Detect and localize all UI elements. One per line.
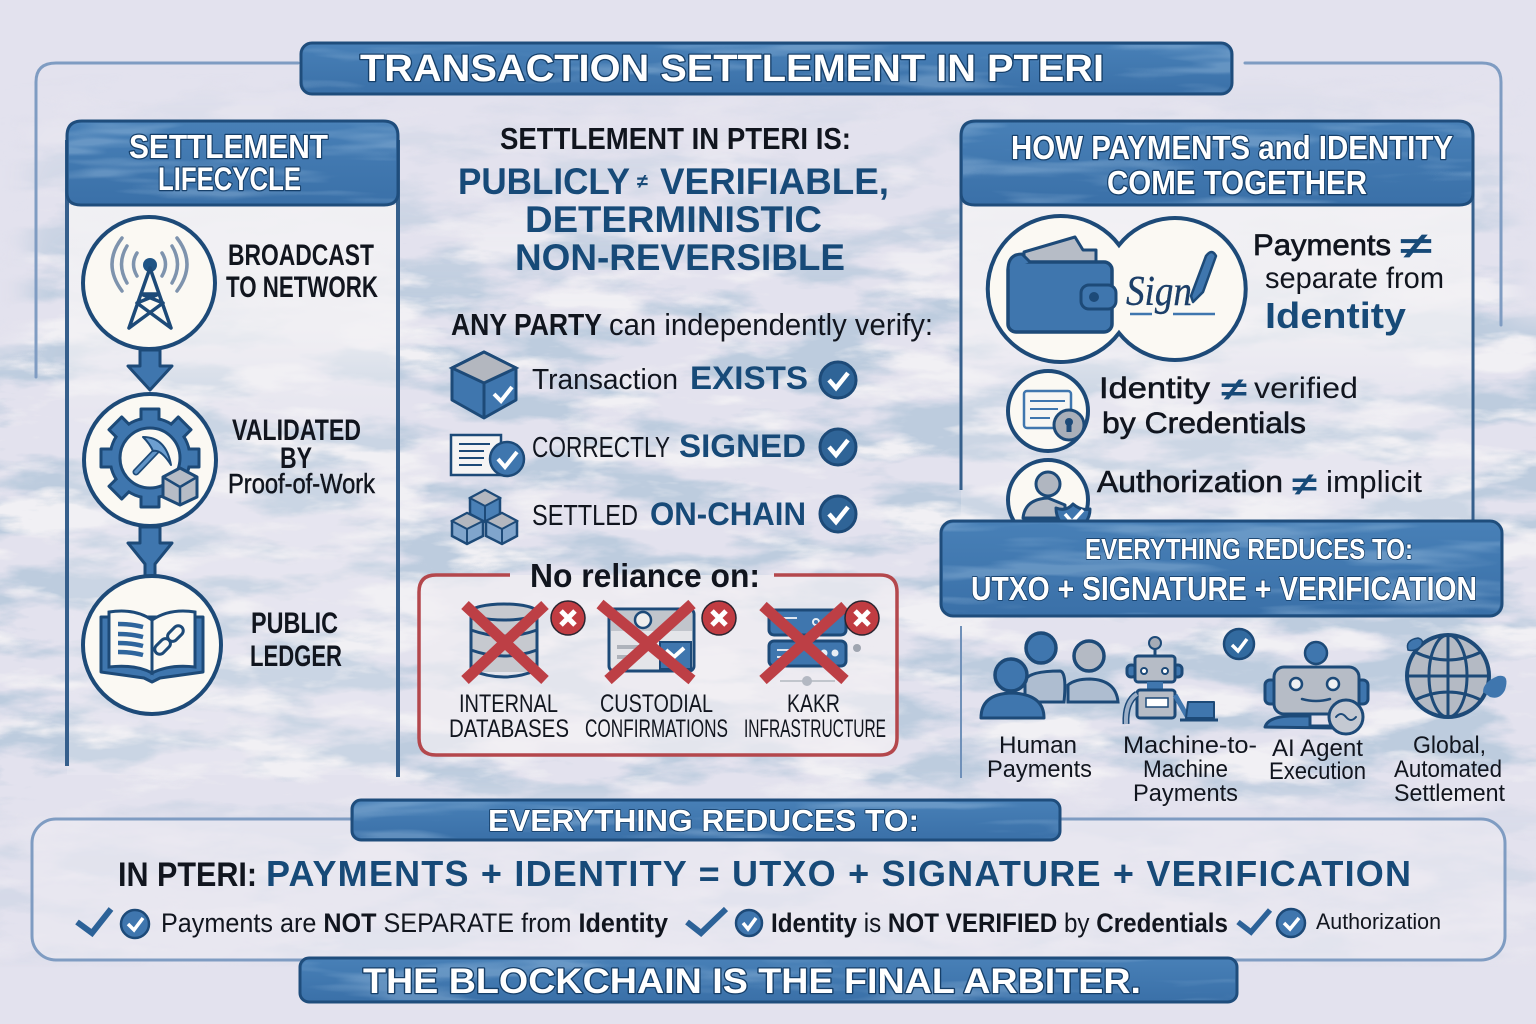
arrow: broadcast to validated [128, 350, 172, 390]
text: payments not separate from identity: separate from [1265, 262, 1444, 295]
panel: bottom summary [32, 800, 1505, 960]
outer frame: top section [36, 63, 1501, 377]
icon: public ledger book [83, 576, 221, 714]
equation: PAYMENTS + IDENTITY = UTXO + SIGNATURE + VERIFICATION [266, 853, 1411, 894]
panel header: SETTLEMENT [129, 128, 328, 165]
label: validated: Proof-of-Work [228, 468, 376, 499]
icon: proof-of-work gear [84, 394, 216, 526]
badge: x [551, 601, 585, 635]
use case: ai agent execution: AI Agent [1272, 735, 1363, 762]
icon: globe [1407, 635, 1506, 717]
icon: robot at desk [1126, 637, 1218, 724]
equation: IN PTERI: [118, 856, 257, 894]
icon: people [981, 633, 1118, 718]
label: custodial confirmations: CONFIRMATIONS [585, 715, 728, 743]
arrow: validated to ledger [128, 527, 172, 578]
text: payments not separate from identity [1253, 225, 1444, 336]
label: broadcast: TO NETWORK [226, 271, 378, 304]
label: kakr infrastructure: KAKR [787, 690, 840, 718]
use case: machine-to-machine payments: Payments [1133, 780, 1238, 807]
panel header: LIFECYCLE [158, 161, 301, 197]
use case: human payments [981, 633, 1118, 783]
label: validated: VALIDATED [232, 414, 361, 447]
text: identity not verified by credentials: Identity [1099, 372, 1210, 405]
label: custodial confirmations [585, 690, 728, 743]
heading: No reliance on: [530, 557, 760, 594]
icon: wallet and signature: Sign [1126, 269, 1192, 315]
banner: everything reduces to: EVERYTHING REDUCES TO: [488, 803, 919, 838]
verification row: correctly signed: CORRECTLY [532, 432, 670, 464]
heading: settlement in pteri is: VERIFIABLE, [660, 161, 889, 202]
use case: human payments: Payments [987, 756, 1092, 783]
use case: global automated settlement: Settlement [1394, 780, 1505, 807]
use case: global automated settlement: Automated [1394, 756, 1502, 783]
text: any party can verify [451, 307, 933, 342]
use case: human payments: Human [999, 732, 1077, 759]
label: broadcast [226, 239, 378, 304]
verification row: correctly signed [451, 428, 856, 476]
text: identity not verified by credentials [1099, 371, 1358, 440]
point: authorization [1238, 909, 1441, 937]
verification row: settled on-chain [452, 490, 856, 544]
text: authorization not implicit: ≠ [1292, 466, 1318, 502]
icon: signed document [451, 435, 524, 476]
text: payments not separate from identity: Payments [1253, 229, 1391, 262]
use case: global automated settlement [1394, 635, 1506, 807]
heading: settlement in pteri is [458, 121, 889, 278]
label: public ledger: PUBLIC [251, 607, 338, 640]
text: authorization not implicit: Authorization [1097, 464, 1283, 499]
title banner [301, 43, 1232, 94]
badge: x [702, 601, 736, 635]
label: broadcast: BROADCAST [228, 239, 374, 272]
icon: crossed database [465, 604, 545, 680]
verification row: transaction exists: Transaction [532, 364, 678, 396]
point: authorization: Authorization [1316, 909, 1441, 934]
label: public ledger [250, 607, 342, 673]
panel: settlement lifecycle [67, 121, 398, 777]
label: validated [228, 414, 376, 499]
icon: crossed servers [763, 606, 861, 686]
icon: wallet and signature [988, 216, 1246, 362]
icon: check [820, 429, 856, 465]
use case: machine-to-machine payments: Machine [1143, 756, 1228, 783]
label: internal databases: DATABASES [449, 715, 569, 743]
badge: x [845, 601, 879, 635]
text: payments not separate from identity: Identity [1265, 295, 1406, 336]
icon: check [820, 496, 856, 532]
label: public ledger: LEDGER [250, 640, 342, 673]
panel header: HOW PAYMENTS and IDENTITY [1011, 129, 1453, 166]
icon: credential lock [1008, 371, 1088, 451]
panel: no reliance on [419, 557, 897, 755]
text: payments not separate from identity: ≠ [1400, 225, 1432, 266]
label: internal databases: INTERNAL [459, 690, 558, 718]
text: any party can verify: can independently verify: [609, 307, 933, 342]
label: kakr infrastructure [744, 690, 886, 743]
icon: stacked blocks [452, 490, 517, 544]
heading: settlement in pteri is: NON-REVERSIBLE [515, 237, 845, 278]
heading: settlement in pteri is: SETTLEMENT IN PTERI IS: [500, 121, 851, 156]
title: TRANSACTION SETTLEMENT IN PTERI [360, 48, 1104, 90]
heading: settlement in pteri is: ≠ [637, 171, 648, 193]
label: custodial confirmations: CUSTODIAL [600, 690, 713, 718]
panel header [961, 121, 1473, 205]
icon: crossed custodial confirmation [600, 604, 694, 680]
icon: ai agent [1265, 642, 1368, 734]
label: kakr infrastructure: INFRASTRUCTURE [744, 715, 886, 743]
banner: the blockchain is the final arbiter: THE BLOCKCHAIN IS THE FINAL ARBITER. [363, 962, 1141, 1001]
use case: ai agent execution [1265, 642, 1368, 785]
use case: machine-to-machine payments [1123, 629, 1257, 807]
icon: authorized user [1008, 460, 1090, 540]
heading: settlement in pteri is: DETERMINISTIC [525, 199, 822, 240]
verification row: settled on-chain: SETTLED [532, 500, 638, 532]
background: lavender sky with clouds [0, 122, 1536, 910]
banner: the blockchain is the final arbiter [300, 958, 1237, 1002]
use case: machine-to-machine payments: Machine-to- [1123, 732, 1257, 759]
label: internal databases [449, 690, 569, 743]
use case: ai agent execution: Execution [1269, 758, 1366, 785]
badge: check [1224, 629, 1254, 659]
verification row: settled on-chain: ON-CHAIN [650, 496, 806, 532]
point: identity not verified: Identity is NOT VERIFIED by Credentials [771, 908, 1228, 938]
verification row: transaction exists [452, 352, 856, 418]
icon: check [820, 362, 856, 398]
text: identity not verified by credentials: verified [1254, 372, 1358, 405]
text: any party can verify: ANY PARTY [451, 307, 602, 342]
verification row: correctly signed: SIGNED [679, 428, 806, 464]
heading: settlement in pteri is: PUBLICLY [458, 161, 630, 202]
use case: global automated settlement: Global, [1413, 732, 1486, 759]
verification row: transaction exists: EXISTS [690, 360, 808, 396]
icon: cube [452, 352, 516, 418]
point: payments not separate: Payments are NOT SEPARATE from Identity [161, 908, 668, 938]
icon: broadcast tower [83, 217, 215, 349]
banner: everything reduces to (right): EVERYTHING REDUCES TO: [1085, 534, 1413, 566]
banner: everything reduces to (right) [941, 521, 1502, 616]
text: authorization not implicit: implicit [1326, 464, 1422, 499]
banner: everything reduces to [352, 800, 1060, 840]
label: validated: BY [280, 442, 312, 475]
text: authorization not implicit [1097, 464, 1422, 502]
panel header: COME TOGETHER [1107, 164, 1367, 201]
panel header [67, 121, 398, 205]
text: identity not verified by credentials: ≠ [1221, 371, 1248, 407]
text: identity not verified by credentials: by Credentials [1102, 407, 1306, 440]
panel: how payments and identity come together [961, 121, 1473, 540]
